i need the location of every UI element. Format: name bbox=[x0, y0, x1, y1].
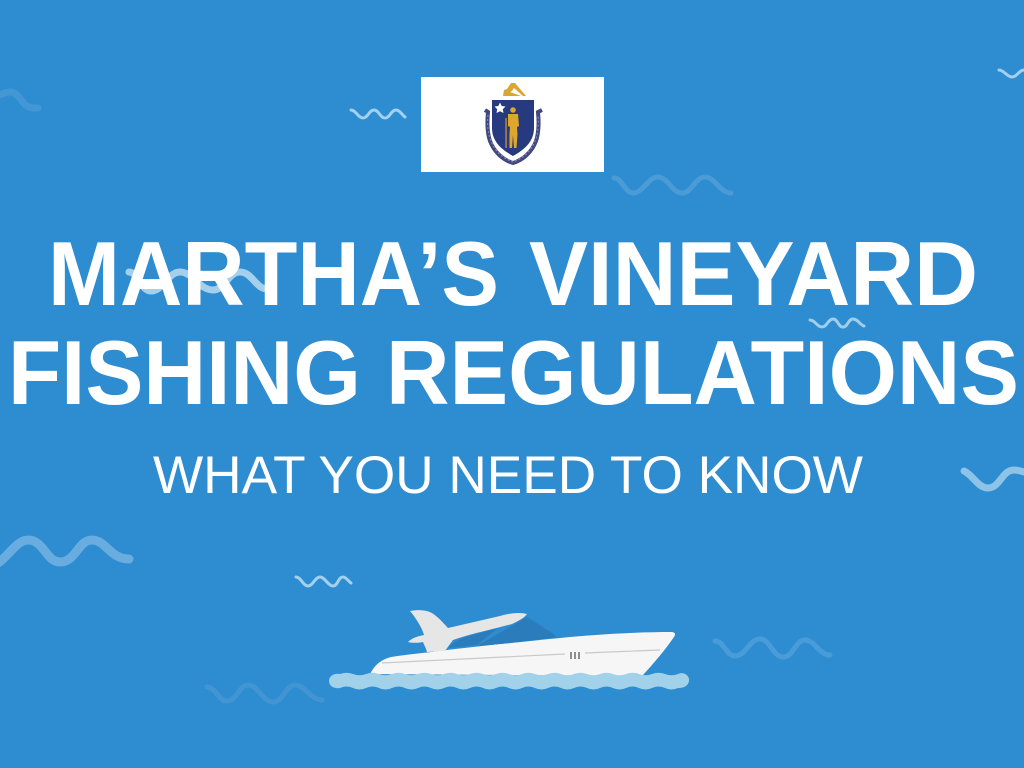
icon: shield bbox=[492, 100, 534, 156]
icon: hull bbox=[370, 632, 675, 676]
background wave: top left bbox=[0, 92, 38, 108]
icon: star bbox=[494, 102, 506, 113]
water band bbox=[329, 673, 689, 690]
subtitle: WHAT YOU NEED TO KNOW bbox=[153, 446, 863, 505]
hull stripe bbox=[382, 650, 660, 663]
illustration: motor yacht on water bbox=[329, 610, 689, 690]
flag of Massachusetts bbox=[421, 77, 604, 172]
background wave: right bbox=[964, 470, 1024, 488]
title: VINEYARD bbox=[529, 224, 978, 325]
background wave: under flag bbox=[614, 177, 731, 193]
background wave: bottom left bbox=[207, 685, 322, 702]
title bbox=[8, 224, 1019, 424]
background wave: lower left bbox=[0, 540, 129, 564]
title: FISHING bbox=[8, 323, 361, 424]
background wave: behind title left bbox=[129, 272, 267, 291]
icon: native figure bbox=[506, 107, 519, 148]
icon: radar arch bbox=[408, 610, 527, 652]
background wave: behind title right bbox=[810, 319, 864, 327]
title: REGULATIONS bbox=[386, 323, 1019, 424]
icon: crest arm bbox=[503, 83, 526, 96]
icon: side window bbox=[448, 628, 498, 648]
icon: vents bbox=[570, 652, 580, 659]
background wave: small lower bbox=[296, 577, 351, 586]
background wave: small top bbox=[351, 110, 405, 118]
background wave: top right bbox=[999, 70, 1024, 77]
icon: windshield bbox=[477, 617, 557, 646]
title: MARTHA’S bbox=[48, 224, 499, 325]
icon: motto ribbon bbox=[485, 110, 542, 163]
background wave: bottom right bbox=[715, 639, 830, 657]
